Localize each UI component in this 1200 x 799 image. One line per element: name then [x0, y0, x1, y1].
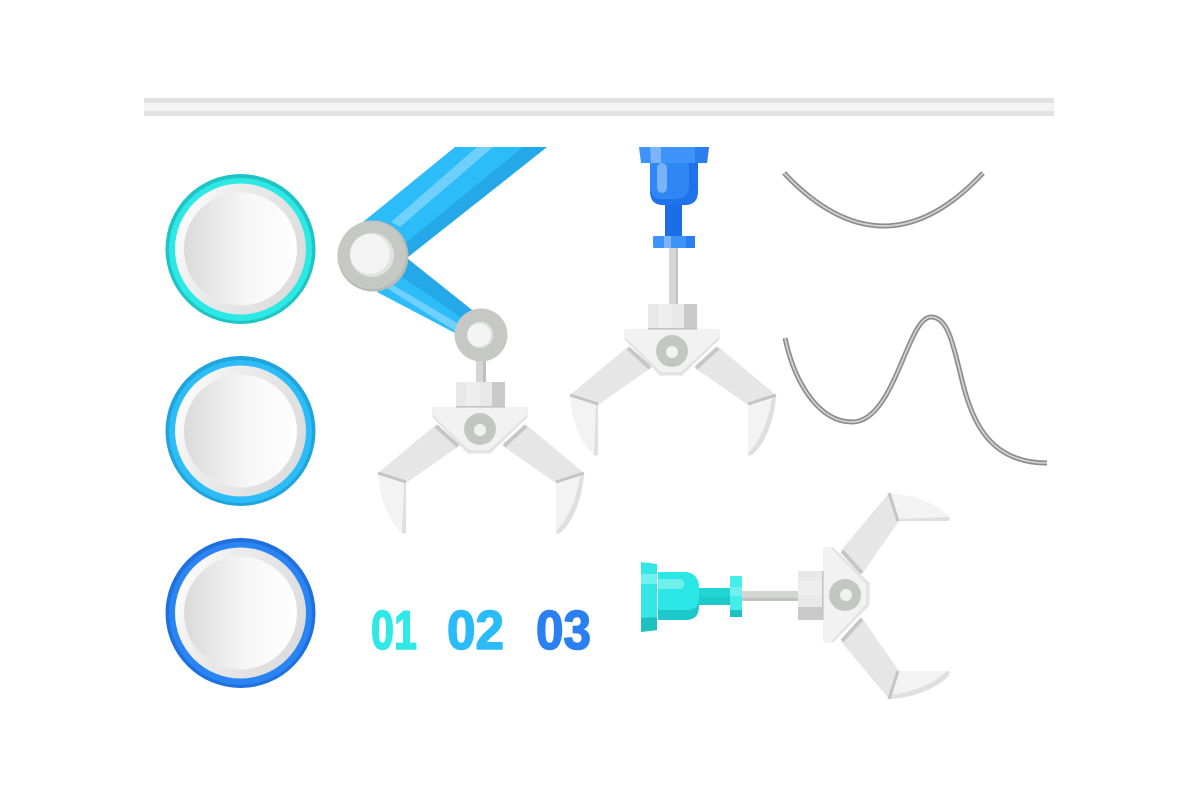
cable: wave curve	[785, 317, 1047, 463]
number 01: 01	[371, 599, 417, 661]
vertical actuator with gripper	[570, 147, 776, 456]
gripper claw	[378, 382, 584, 534]
number 02: 02	[447, 599, 504, 661]
top rail	[144, 98, 1054, 116]
lower arm segment	[377, 259, 472, 333]
connecting rod	[476, 358, 486, 382]
badge circle: teal	[166, 174, 316, 324]
cable: shallow curve	[784, 173, 983, 226]
horizontal actuator with gripper	[641, 493, 950, 699]
gripper claw	[570, 304, 776, 456]
elbow joint	[454, 308, 508, 362]
badge circle: royal blue	[166, 538, 316, 688]
gripper claw	[798, 493, 950, 699]
piston rod	[669, 248, 678, 305]
step numbers	[371, 599, 591, 661]
badge circle: sky blue	[166, 356, 316, 506]
number 03: 03	[536, 599, 591, 661]
upper arm segment	[363, 147, 547, 257]
blue actuator head	[639, 147, 709, 248]
piston rod	[742, 591, 799, 601]
shoulder joint	[338, 220, 408, 292]
teal actuator head	[641, 562, 742, 632]
robot arm with gripper	[338, 147, 584, 534]
